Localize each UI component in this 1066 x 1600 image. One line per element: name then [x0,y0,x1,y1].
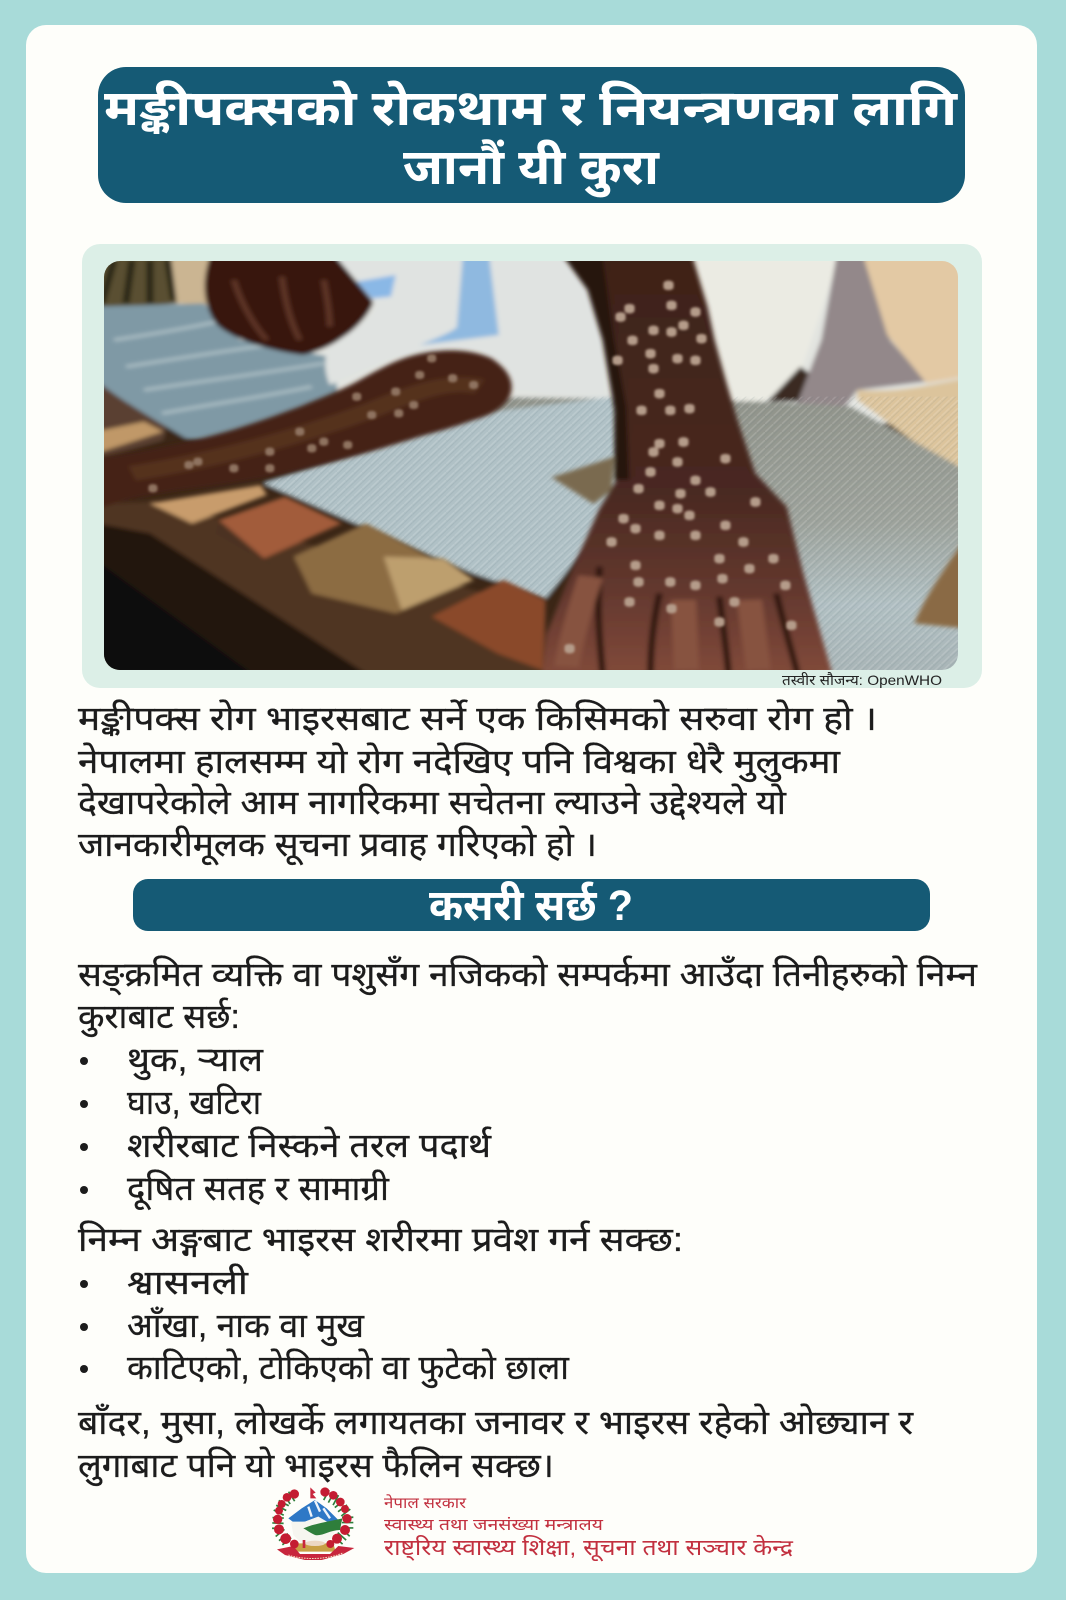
icon: Nepal government emblem [273,1487,354,1560]
bullet list: entry routes: काटिएको, टोकिएको वा फुटेको छाला [127,1348,570,1388]
section heading text: कसरी सर्छ ? [429,881,633,930]
ministry text block: राष्ट्रिय स्वास्थ्य शिक्षा, सूचना तथा सञ्चार केन्द्र [384,1534,793,1562]
bullet list: transmission sources: दूषित सतह र सामाग्री [127,1170,390,1210]
ministry text block: नेपाल सरकार [384,1494,467,1512]
title line 2: जानौं यी कुरा [403,139,660,199]
closing paragraph: बाँदर, मुसा, लोखर्के लगायतका जनावर र भाइरस रहेको ओछ्यान र [78,1403,914,1443]
ministry text block: स्वास्थ्य तथा जनसंख्या मन्त्रालय [384,1516,604,1534]
photo: monkeypox lesions on arms [96,257,965,673]
photo panel [82,244,982,688]
intro paragraph [78,699,877,865]
photo credit: तस्वीर सौजन्य: OpenWHO [782,672,942,688]
ministry text block [384,1494,793,1562]
bullet list: transmission sources: थुक, र्‍याल [127,1041,264,1080]
intro paragraph: नेपालमा हालसम्म यो रोग नदेखिए पनि विश्वका धेरै मुलुकमा [78,742,841,782]
bullet list: entry routes: श्वासनली [127,1264,249,1302]
intro paragraph: जानकारीमूलक सूचना प्रवाह गरिएको हो । [78,826,597,865]
transmission intro: कुराबाट सर्छ: [78,997,240,1037]
closing paragraph: लुगाबाट पनि यो भाइरस फैलिन सक्छ। [78,1446,554,1486]
bullet list: entry routes [80,1264,570,1388]
entry routes intro: निम्न अङ्गबाट भाइरस शरीरमा प्रवेश गर्न सक्छ: [78,1220,683,1259]
transmission intro [78,955,978,1037]
transmission intro: सङ्क्रमित व्यक्ति वा पशुसँग नजिकको सम्पर्कमा आउँदा तिनीहरुको निम्न [78,955,978,995]
bullet list: transmission sources [80,1041,492,1210]
bullet list: entry routes: आँखा, नाक वा मुख [127,1306,365,1346]
mat weave texture [264,397,965,673]
closing paragraph [78,1403,914,1486]
section heading bar [133,879,930,931]
title line 1: मङ्कीपक्सको रोकथाम र नियन्त्रणका लागि [104,80,958,136]
bullet list: transmission sources: शरीरबाट निस्कने तरल पदार्थ [127,1126,492,1165]
bullet list: transmission sources: घाउ, खटिरा [127,1084,262,1122]
intro paragraph: देखापरेकोले आम नागरिकमा सचेतना ल्याउने उद्देश्यले यो [78,783,787,822]
title banner [98,67,965,203]
intro paragraph: मङ्कीपक्स रोग भाइरसबाट सर्ने एक किसिमको सरुवा रोग हो । [78,699,877,738]
